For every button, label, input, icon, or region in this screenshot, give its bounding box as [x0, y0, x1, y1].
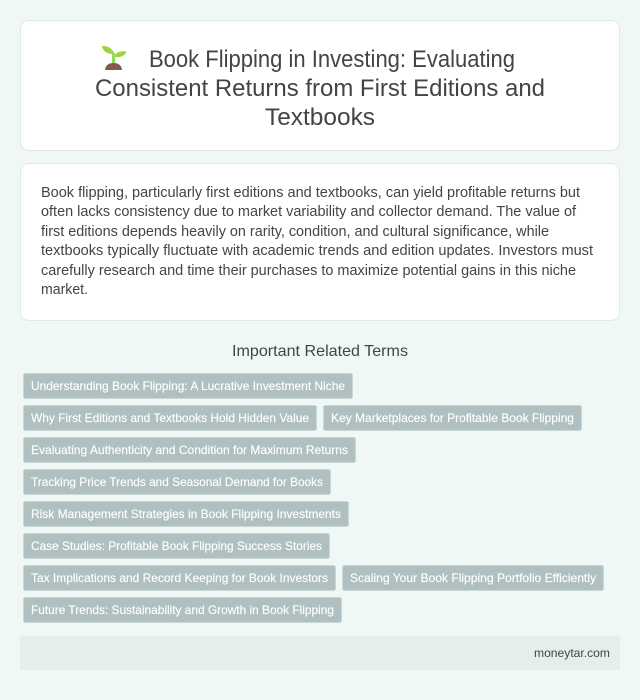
related term tags	[24, 374, 604, 622]
title text: Textbooks	[265, 104, 375, 131]
tag 3: Key Marketplaces for Profitable Book Flipping	[331, 411, 574, 425]
tag 3	[324, 406, 582, 430]
tag 4	[24, 438, 356, 462]
tag 10	[24, 598, 342, 622]
tag 1	[24, 374, 352, 398]
summary text: often lacks consistency due to market variability and collector demand. The value of	[41, 204, 577, 220]
heading: related terms: Important Related Terms	[232, 343, 408, 360]
summary text: carefully research and time their purchases to maximize potential gains in this niche	[41, 263, 576, 279]
summary text	[41, 185, 593, 298]
summary text: first editions depends heavily on rarity, condition, and cultural significance, while	[41, 224, 549, 240]
summary text: market.	[41, 282, 88, 298]
title text	[95, 46, 545, 131]
tag 9: Scaling Your Book Flipping Portfolio Efficiently	[350, 571, 596, 585]
tag 10: Future Trends: Sustainability and Growth in Book Flipping	[31, 603, 334, 617]
title text: Book Flipping in Investing: Evaluating	[149, 46, 515, 73]
title text: Consistent Returns from First Editions and	[95, 75, 545, 102]
tag 6: Risk Management Strategies in Book Flipping Investments	[31, 507, 341, 521]
footer	[20, 636, 620, 670]
tag 6	[24, 502, 348, 526]
panel: title	[20, 20, 620, 150]
tag 2	[24, 406, 316, 430]
tag 7: Case Studies: Profitable Book Flipping Success Stories	[31, 539, 322, 553]
tag 9	[342, 566, 604, 590]
tag 5	[24, 470, 330, 494]
panel: summary	[20, 164, 620, 320]
tag 8: Tax Implications and Record Keeping for Book Investors	[31, 571, 328, 585]
tag 4: Evaluating Authenticity and Condition for Maximum Returns	[31, 443, 348, 457]
summary text: textbooks typically fluctuate with academic trends and edition updates. Investors must	[41, 243, 593, 259]
tag 8	[24, 566, 336, 590]
tag 5: Tracking Price Trends and Seasonal Demand for Books	[31, 475, 323, 489]
summary text: Book flipping, particularly first editions and textbooks, can yield profitable returns but	[41, 185, 580, 201]
tag 7	[24, 534, 330, 558]
tag 1: Understanding Book Flipping: A Lucrative Investment Niche	[31, 379, 345, 393]
footer: moneytar.com	[534, 646, 610, 660]
icon: sprout	[102, 46, 126, 70]
tag 2: Why First Editions and Textbooks Hold Hidden Value	[31, 411, 309, 425]
